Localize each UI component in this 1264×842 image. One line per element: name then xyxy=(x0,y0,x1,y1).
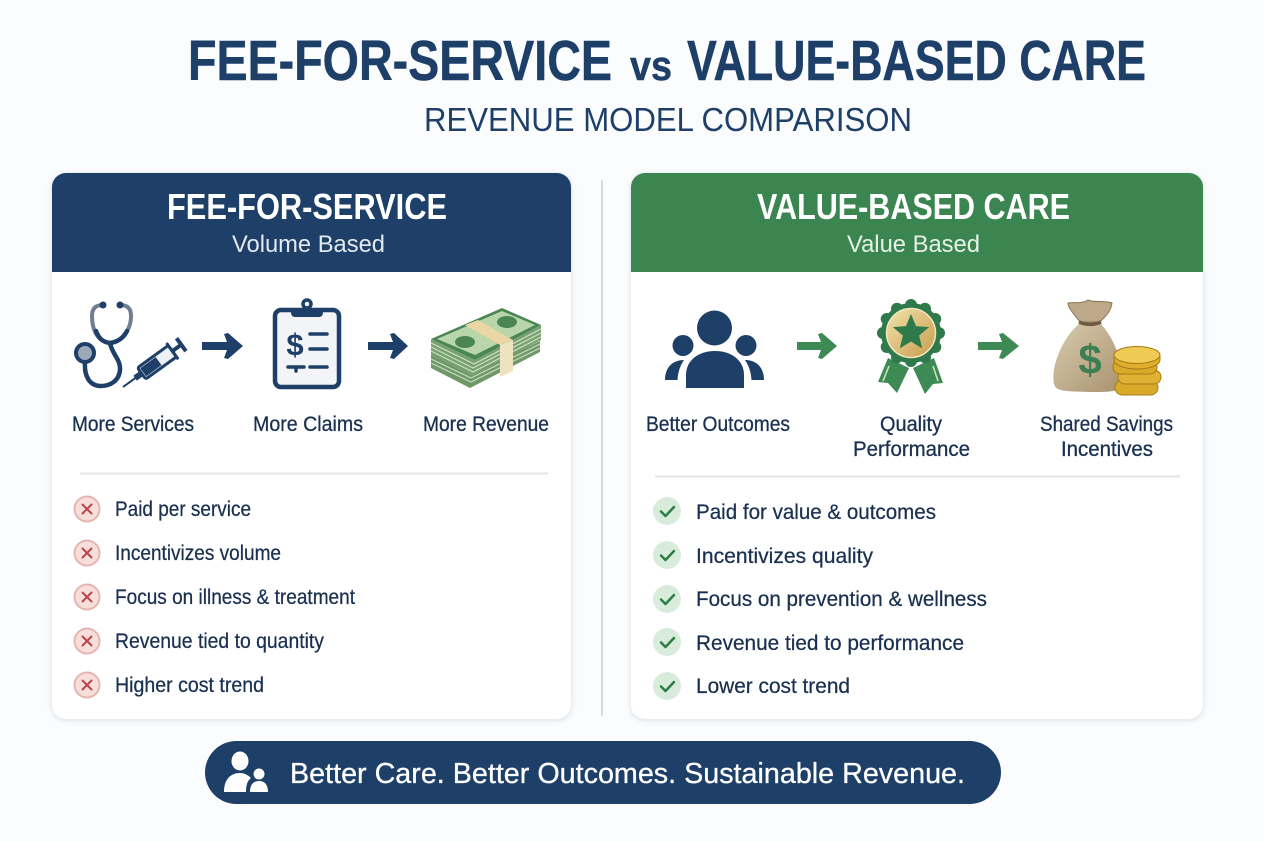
item: lower cost trend xyxy=(653,672,850,700)
arrow xyxy=(202,333,243,359)
icon: quality award rosette xyxy=(877,299,945,394)
icon: people xyxy=(224,752,268,792)
banner: tagline xyxy=(205,741,1001,804)
panel header: value-based care xyxy=(631,173,1203,272)
panel header: fee-for-service: FEE-FOR-SERVICE xyxy=(167,186,447,227)
subtitle: REVENUE MODEL COMPARISON xyxy=(424,101,912,138)
label: quality performance: Quality xyxy=(880,413,942,436)
item: paid per service xyxy=(74,496,251,522)
item: lower cost trend: Lower cost trend xyxy=(696,675,850,698)
label: more services: More Services xyxy=(72,413,194,436)
label: more revenue: More Revenue xyxy=(423,413,549,436)
item: incentivizes quality xyxy=(653,541,873,569)
panel header: value-based care: VALUE-BASED CARE xyxy=(757,186,1070,227)
label: quality performance: Performance xyxy=(853,438,970,461)
list: fee-for-service drawbacks xyxy=(74,496,355,698)
panel header: fee-for-service xyxy=(52,173,571,272)
item: paid per service: Paid per service xyxy=(115,498,251,521)
banner: tagline: Better Care. Better Outcomes. Sustainable Revenue. xyxy=(290,758,965,790)
icon: money bag and coins: $ xyxy=(1078,336,1102,383)
icon: stack of money xyxy=(431,308,541,388)
title xyxy=(188,29,1146,93)
icon: people group xyxy=(665,310,764,388)
label: quality performance xyxy=(853,413,970,461)
item: incentivizes volume: Incentivizes volume xyxy=(115,542,281,565)
item: focus on prevention: Focus on prevention & wellness xyxy=(696,588,987,611)
item: focus on illness: Focus on illness & treatment xyxy=(115,586,355,609)
label: shared savings incentives: Shared Savings xyxy=(1040,413,1173,436)
item: revenue tied to quantity: Revenue tied to quantity xyxy=(115,630,324,653)
item: incentivizes quality: Incentivizes quality xyxy=(696,545,873,568)
label: shared savings incentives xyxy=(1040,413,1173,461)
title: FEE-FOR-SERVICE xyxy=(188,29,612,93)
label: shared savings incentives: Incentives xyxy=(1061,438,1153,461)
item: higher cost trend: Higher cost trend xyxy=(115,674,264,697)
list: value-based care benefits xyxy=(653,497,987,700)
label: more claims: More Claims xyxy=(253,413,363,436)
panel: value-based care xyxy=(631,173,1203,719)
arrow xyxy=(978,333,1019,359)
icon: stethoscope and syringe xyxy=(76,302,187,395)
panel: fee-for-service xyxy=(52,173,571,719)
item: paid for value: Paid for value & outcomes xyxy=(696,501,936,524)
panel header: value-based care: Value Based xyxy=(847,231,980,258)
panel header: fee-for-service: Volume Based xyxy=(232,231,385,258)
item: higher cost trend xyxy=(74,672,264,698)
title: VALUE-BASED CARE xyxy=(687,29,1146,93)
icon: clipboard claim: $ xyxy=(286,327,304,362)
label: better outcomes: Better Outcomes xyxy=(646,413,790,436)
arrow xyxy=(368,333,408,359)
title: vs xyxy=(630,42,672,89)
item: incentivizes volume xyxy=(74,540,281,566)
icon: money bag and coins xyxy=(1053,300,1161,395)
item: revenue tied to performance: Revenue tied to performance xyxy=(696,632,964,655)
icon: clipboard claim xyxy=(275,300,339,387)
arrow xyxy=(797,333,837,359)
item: paid for value xyxy=(653,497,936,525)
